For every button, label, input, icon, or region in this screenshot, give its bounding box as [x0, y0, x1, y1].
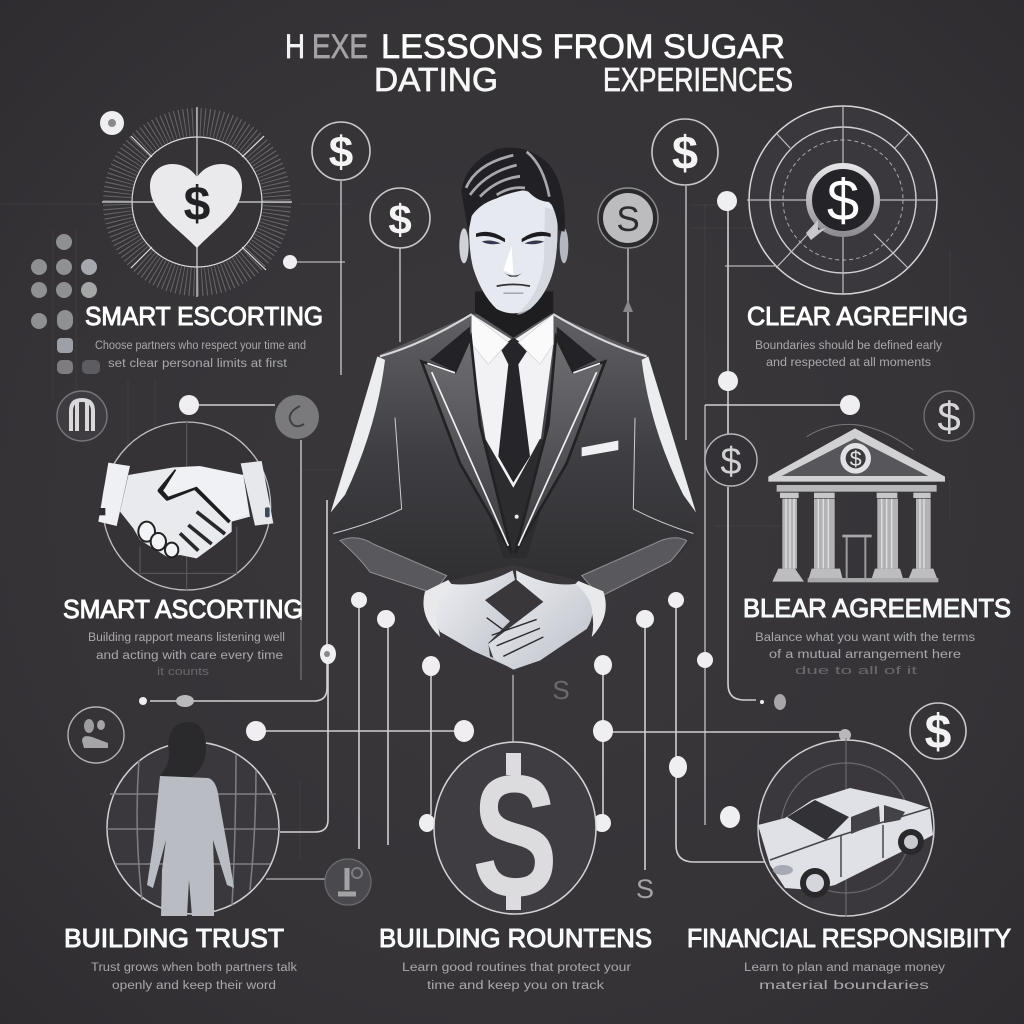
icon: dollar circle left of bank: $ — [720, 441, 742, 483]
icon: dollar circle top right: $ — [672, 126, 698, 179]
icon: dollar circle top left — [312, 122, 370, 180]
text block: clear agrefing description: and respected at all moments — [766, 357, 931, 369]
icon: faint glass badge — [325, 859, 371, 905]
text block: financial responsibility description: material boundaries — [759, 980, 929, 992]
icon: dollar circle top left: $ — [329, 128, 353, 177]
panel: clear agreements target — [747, 106, 968, 369]
icon: car in circle — [758, 738, 934, 917]
heading: blear agreements: BLEAR AGREEMENTS — [743, 593, 1011, 623]
icon: grey coin — [598, 188, 658, 312]
text block: building trust description: openly and keep their word — [112, 980, 276, 992]
text block: blear agreements description: Balance what you want with the terms — [755, 632, 975, 644]
panel: smart escorting heart — [85, 107, 323, 370]
title: H — [285, 28, 305, 66]
icon: dollar circle top right — [652, 119, 718, 185]
icon: people badge — [57, 391, 107, 441]
icon: radial dial with heart — [102, 107, 292, 297]
icon: handshake — [98, 422, 273, 590]
text block: smart escorting description: set clear personal limits at first — [108, 358, 288, 370]
title: EXE — [312, 28, 368, 66]
icon: bank building: $ — [850, 447, 862, 471]
icon: bank building — [768, 424, 945, 582]
text block: smart ascorting description: it counts — [157, 666, 210, 678]
icon: dollar circle by car — [910, 703, 966, 759]
panel: building trust — [64, 707, 297, 992]
cuffs — [423, 580, 606, 637]
hair — [461, 148, 565, 232]
icon: radial dial with heart: $ — [184, 178, 211, 231]
heading: building trust: BUILDING TRUST — [64, 923, 284, 953]
title: DATING — [374, 61, 498, 98]
icon: grey coin: S — [616, 200, 640, 239]
panel: blear agreements bank — [705, 391, 1011, 677]
neck — [475, 291, 553, 338]
text block: blear agreements description: due to all of it — [795, 665, 917, 677]
icon: grey badge — [68, 707, 124, 763]
text block: building trust description — [91, 962, 297, 992]
text block: building rountens description: Learn good routines that protect your — [402, 962, 631, 974]
face — [469, 190, 558, 313]
connector lines — [150, 181, 848, 879]
text block: financial responsibility description: Learn to plan and manage money — [744, 962, 945, 974]
icon: concentric target with dollar: $ — [827, 168, 859, 233]
ears — [459, 228, 469, 263]
dot grid decoration — [31, 234, 100, 374]
heading: financial responsibiity: FINANCIAL RESPONSIBIITY — [687, 923, 1011, 953]
icon: big dollar circle: S — [472, 740, 558, 932]
right lapel — [513, 326, 597, 553]
icon: dollar circle right of bank: $ — [937, 393, 961, 440]
tie — [498, 338, 530, 483]
title — [285, 28, 793, 98]
pocket square — [582, 441, 618, 456]
text block: clear agrefing description: Boundaries should be defined early — [755, 340, 942, 352]
right hand — [488, 570, 592, 670]
panel: smart ascorting handshake — [57, 391, 319, 678]
icon: faint dollar below hands: S — [552, 675, 570, 705]
panel: building rountens — [379, 740, 652, 992]
text block: blear agreements description — [755, 632, 975, 677]
icon: dollar circle inner left — [370, 188, 430, 248]
brows and eyes — [476, 232, 551, 242]
mouth — [497, 284, 530, 286]
heading: smart ascorting: SMART ASCORTING — [63, 594, 303, 624]
nose — [503, 272, 524, 277]
icon: concentric target with dollar — [747, 106, 937, 294]
heading: clear agrefing: CLEAR AGREFING — [747, 301, 968, 331]
vest — [467, 435, 560, 558]
heading: building rountens: BUILDING ROUNTENS — [379, 923, 652, 953]
panel: financial responsibility — [687, 703, 1011, 992]
text block: clear agrefing description — [755, 340, 942, 369]
text block: smart ascorting description — [88, 632, 285, 678]
shirt collars — [472, 314, 553, 364]
text block: smart ascorting description: and acting with care every time — [96, 650, 283, 662]
icon: grey coin badge — [275, 395, 319, 439]
connector nodes — [100, 111, 860, 832]
icon: dollar circle inner left: $ — [388, 196, 412, 243]
icon: dollar circle by car: $ — [925, 706, 952, 759]
button — [515, 515, 519, 519]
title: EXPERIENCES — [603, 61, 793, 98]
jacket — [331, 314, 697, 593]
text block: financial responsibility description — [744, 962, 945, 992]
left hand — [436, 570, 517, 670]
icon: dollar circle left of bank — [705, 434, 757, 486]
text block: smart escorting description: Choose partners who respect your time and — [95, 340, 306, 352]
icon: small dollar bottom: S — [636, 874, 654, 904]
heading: smart escorting: SMART ESCORTING — [85, 301, 323, 331]
text block: building rountens description: time and keep you on track — [427, 980, 604, 992]
central figure: man in suit — [331, 148, 697, 670]
text block: building rountens description — [402, 962, 631, 992]
text block: blear agreements description: of a mutual arrangement here — [769, 649, 961, 661]
title: LESSONS FROM SUGAR — [381, 28, 785, 66]
text block: smart escorting description — [95, 340, 306, 370]
icon: dollar circle right of bank — [924, 391, 974, 441]
left lapel — [430, 326, 513, 553]
text block: building trust description: Trust grows when both partners talk — [91, 962, 297, 974]
text block: smart ascorting description: Building rapport means listening well — [88, 632, 285, 644]
shirt — [472, 314, 553, 488]
icon: globe grid with figure — [107, 722, 279, 916]
